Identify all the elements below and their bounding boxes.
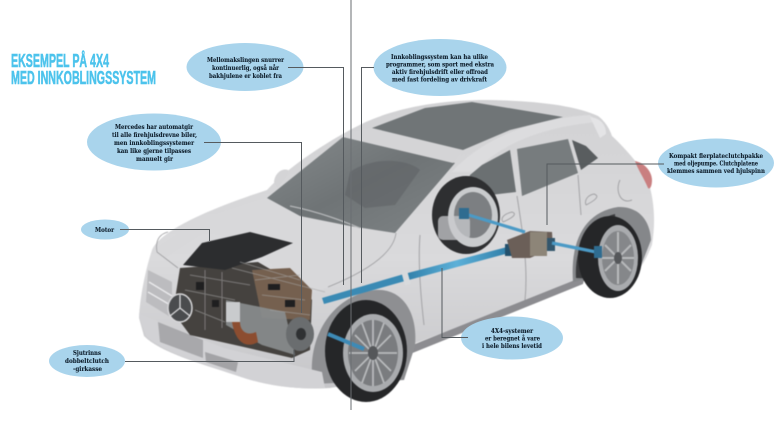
callout: programmer (362, 39, 506, 283)
quarter window (572, 140, 598, 170)
engine details (185, 262, 325, 330)
windshield (267, 137, 455, 233)
callout: automatgir: til alle firehjulsdrevne biler, (112, 131, 197, 139)
front propshaft (322, 244, 513, 304)
callout: levetid (442, 268, 563, 360)
callout: programmer: Innkoblingssystem kan ha ulike (391, 53, 488, 61)
gearbox (286, 317, 314, 351)
grille (146, 270, 172, 318)
sunroof (372, 102, 563, 150)
filter (226, 302, 240, 322)
tail light (635, 161, 652, 189)
callout: clutchpakke: Kompakt flerplateclutchpakke (669, 152, 763, 160)
engine (173, 232, 325, 358)
callout: mellomakslingen: bakhjulene er koblet fra (209, 72, 283, 80)
callout: automatgir (87, 114, 302, 313)
rear spoiler (590, 117, 606, 138)
door lines and handles (419, 175, 632, 325)
callout: levetid: 4X4-systemer (491, 327, 533, 335)
car illustration (139, 100, 654, 402)
callout: automatgir: kan like gjerne tilpasses (117, 147, 191, 155)
vertical center line (350, 0, 352, 410)
callout: motor (81, 220, 210, 241)
title: EKSEMPEL PÅ 4X4 (11, 51, 109, 71)
hood crease (157, 232, 396, 287)
callout: clutchpakke (547, 138, 774, 225)
callout: girkasse: dobbeltclutch (65, 357, 109, 365)
callout: automatgir: manuelt gir (136, 155, 173, 163)
mirror (274, 170, 288, 188)
rear drive unit (507, 231, 555, 258)
car body (139, 100, 654, 388)
title (11, 51, 156, 88)
rear wheel (578, 216, 642, 298)
title: MED INNKOBLINGSSYSTEM (11, 68, 156, 88)
callout: levetid: er beregnet å vare (485, 334, 540, 342)
callout: motor: Motor (95, 226, 114, 234)
roof band (343, 128, 463, 163)
front bumper (139, 270, 325, 388)
callout: automatgir: Mercedes har automatgir (115, 123, 193, 131)
wiper (290, 206, 360, 228)
turbo (232, 322, 258, 345)
roof rail (452, 115, 598, 172)
front wheel (325, 300, 407, 402)
callout: programmer: aktiv firehjulsdrift eller offroad (392, 68, 488, 76)
front wheel arch (312, 290, 415, 384)
far front wheel (432, 176, 500, 254)
front half shaft (328, 334, 364, 349)
callout: levetid: i hele bilens levetid (482, 342, 542, 350)
callout: programmer: programmer, som sport med ekstra (386, 60, 495, 68)
front door window (465, 150, 516, 198)
windshield interior shadow (345, 161, 420, 208)
callout: girkasse: Sjutrinns (73, 349, 101, 357)
callout: automatgir: men innkoblingssystemer (114, 139, 194, 147)
sill (410, 276, 585, 354)
rear wheel arch (573, 207, 651, 282)
callout: mellomakslingen (186, 43, 344, 285)
hood highlight (156, 198, 395, 296)
callout: mellomakslingen: Mellomakslingen snurrer (207, 56, 284, 64)
rear half shafts (459, 208, 602, 258)
mercedes star (168, 294, 192, 322)
callout: girkasse: -girkasse (73, 365, 102, 373)
rear door window (517, 139, 578, 196)
callout: girkasse (49, 345, 294, 377)
callout: programmer: med fast fordeling av drivkraft (392, 76, 488, 84)
engine cover (183, 232, 293, 270)
callout: mellomakslingen: kontinuerlig, også når (212, 63, 279, 72)
